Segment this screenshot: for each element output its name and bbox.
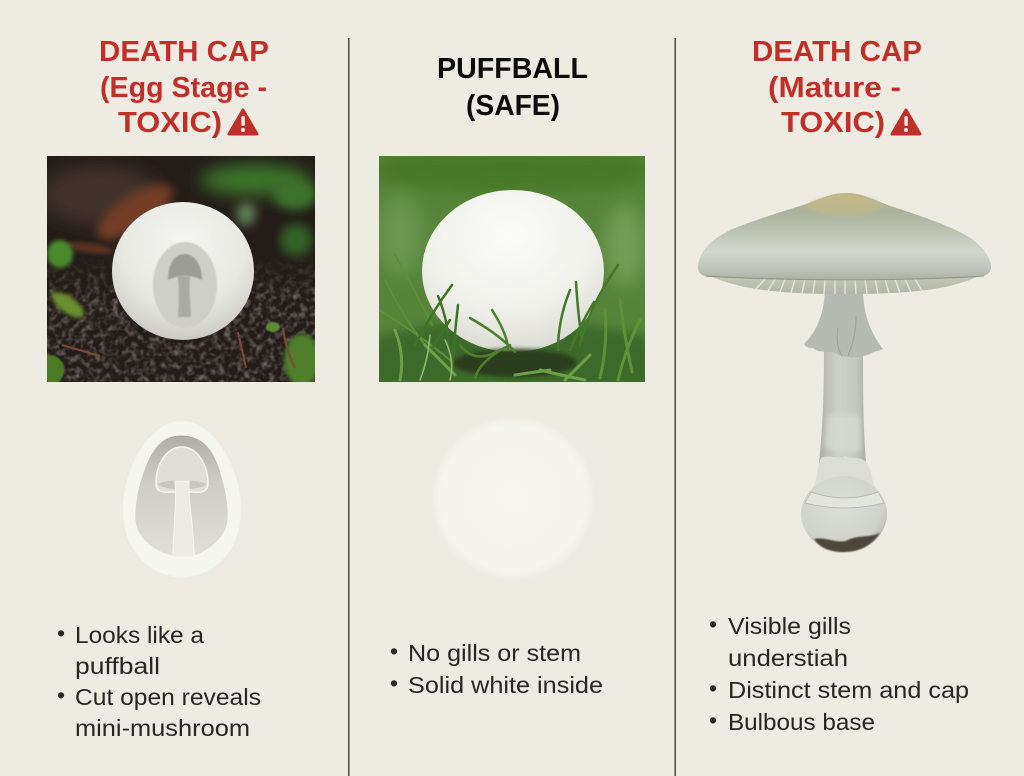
text block: mature bullets: Bulbous base [728,709,875,735]
heading: puffball safe: (SAFE) [466,90,560,122]
ball [422,190,604,352]
volva band [811,456,878,494]
heading: death cap egg stage: (Egg Stage - [100,72,267,104]
soil [814,533,880,552]
icon: warning triangle [229,110,257,134]
egg [112,202,254,340]
text block: egg stage bullets: Looks like a [75,622,204,648]
heading: puffball safe: PUFFBALL [437,53,588,85]
text block: puffball bullets [390,638,603,698]
photo: puffball in grass [379,156,645,382]
heading: death cap egg stage: TOXIC) [118,107,222,139]
gills [702,272,987,294]
stem [819,345,866,463]
heading: death cap egg stage [99,36,269,139]
text block: puffball bullets: No gills or stem [408,640,581,666]
diagram: puffball cross-section [431,416,595,580]
illustration: mature mushroom [698,193,991,552]
bulb [801,476,887,552]
heading: death cap mature: (Mature - [768,72,901,104]
text block: mature bullets: Distinct stem and cap [728,677,969,703]
photo: egg in soil [36,156,320,386]
text block: egg stage bullets: • [57,682,65,708]
heading: puffball safe [437,53,588,122]
text block: egg stage bullets: mini-mushroom [75,715,250,741]
text block: egg stage bullets: • [57,620,65,646]
text block: egg stage bullets [57,620,261,741]
heading: death cap mature: DEATH CAP [752,36,922,68]
text block: mature bullets: understiah [728,645,848,671]
text block: puffball bullets: • [390,670,398,696]
text block: egg stage bullets: Cut open reveals [75,684,261,710]
column divider right [674,38,676,776]
heading: death cap egg stage: DEATH CAP [99,36,269,68]
text block: mature bullets: • [709,611,717,637]
cap [698,193,991,279]
text block: puffball bullets: • [390,638,398,664]
column divider left [348,38,350,776]
heading: death cap mature: TOXIC) [781,107,885,139]
text block: puffball bullets: Solid white inside [408,672,603,698]
text block: mature bullets: Visible gills [728,613,851,639]
text block: mature bullets: • [709,707,717,733]
panel: death cap egg stage [36,36,320,741]
ring [804,290,883,357]
text block: mature bullets: • [709,675,717,701]
icon: warning triangle [892,110,920,134]
panel: puffball [379,58,645,693]
diagram: egg cross-section [122,420,242,578]
text block: egg stage bullets: puffball [75,653,160,679]
heading: death cap mature [752,36,922,139]
panel: death cap mature [698,36,991,735]
text block: mature bullets [709,611,969,735]
